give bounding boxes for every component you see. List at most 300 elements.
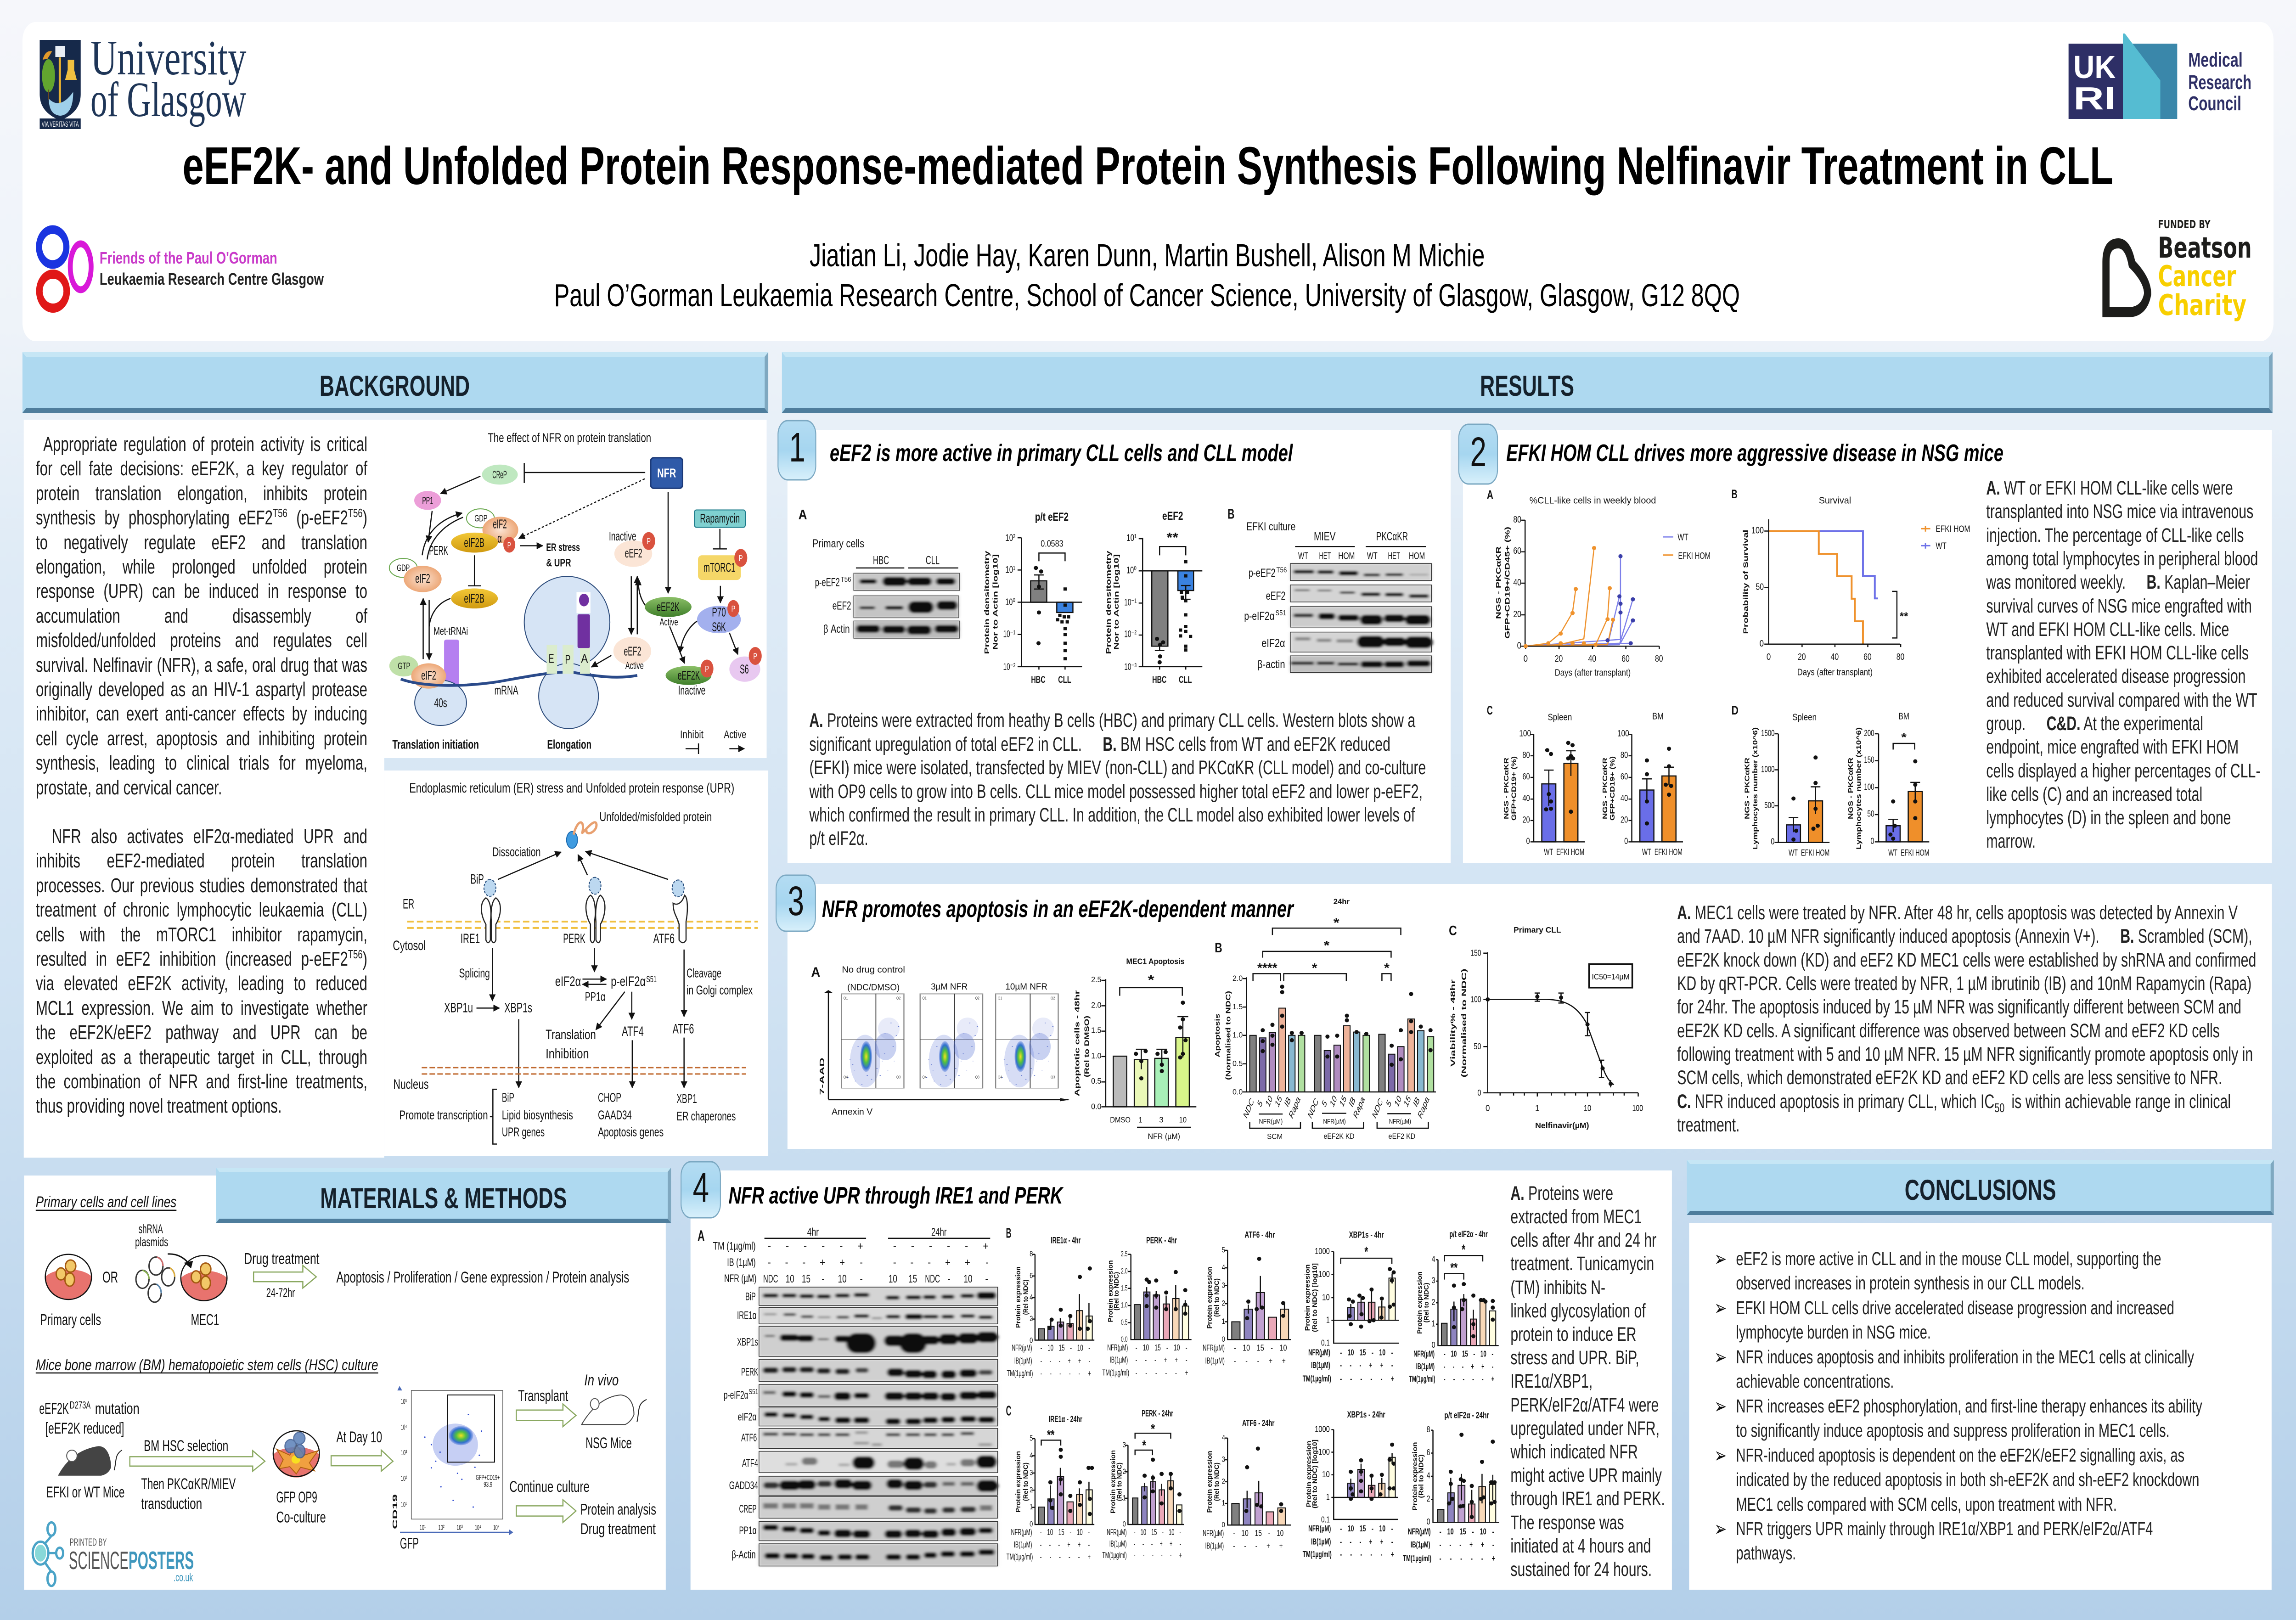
conclusions list: ➢ [1714,1517,1727,1541]
methods workflow diagram: .co.uk [174,1571,193,1584]
panel 3: NFR promotes apoptosis: IC50=14µM [1592,973,1630,981]
protein expression bar charts: 4 [1222,1263,1225,1272]
background text: second paragraph [0,824,390,1119]
background text: first paragraph: cell cycle arrest, apoptosis and inhibiting protein [36,727,367,750]
blood, survival and organ charts: BM [1652,711,1664,721]
blood, survival and organ charts: NGS - PKCαKR [1847,758,1854,819]
blood, survival and organ charts: NGS - PKCαKR [1601,758,1609,819]
protein expression bar charts: Protein expression [1411,1442,1418,1511]
flow plots, apoptosis bars and dose curve: 15 [1273,1094,1284,1108]
methods workflow diagram: BM HSC selection [144,1437,228,1454]
conclusions list: NFR induces apoptosis and inhibits proliferation in the MEC1 cells at clinically [1736,1346,2194,1367]
figure: effect of NFR on protein translation: Active [724,728,746,741]
western blots and bar charts: Protein densitometry [983,550,990,654]
background text: first paragraph: inhibitor, can exert anti-cancer effects by inducing [36,703,367,725]
protein expression bar charts: - - - + + - [1041,1356,1090,1366]
flow plots, apoptosis bars and dose curve: 1.0 [1232,1031,1243,1039]
panel 3 description: SCM cells, which demonstrated eEF2K KD and eEF2 KD cells are less sensitive to NFR. [1677,1067,2222,1088]
protein expression bar charts: TM(1µg/ml) [1007,1552,1033,1562]
panel 4: NFR active UPR [681,1162,1672,1590]
western blots and bar charts: 10⁻² [1124,628,1137,639]
protein expression bar charts: - - - - - + [1134,1550,1182,1560]
UPR western blots: β-Actin [732,1549,756,1561]
blood, survival and organ charts: NGS - PKCαKR [1495,546,1502,619]
flow plot: CD19 vs GFP: 10³ [456,1524,463,1532]
protein expression bar charts: Protein expression [1014,1451,1022,1513]
blood, survival and organ charts: B [1732,487,1738,501]
protein expression bar charts: 3 [1222,1281,1225,1290]
protein expression bar charts: - 10 15 - 10 - [1041,1343,1090,1353]
protein expression bar charts: ** [1047,1427,1055,1443]
protein expression bar charts: 1.5 [1121,1283,1127,1292]
flow plots, apoptosis bars and dose curve: DMSO [1110,1115,1131,1124]
western blots and bar charts: HBC [873,554,889,567]
arrow: transplant [516,1404,576,1427]
flow plots, apoptosis bars and dose curve: 1.5 [1232,1002,1243,1011]
blood, survival and organ charts: NGS - PKCαKR [1743,758,1751,819]
protein expression bar charts: Protein expression [1305,1441,1312,1507]
protein expression bar charts: NFR(µM) [1308,1524,1331,1534]
UPR western blots: NDC [763,1273,778,1285]
blood, survival and organ charts: GFP+CD19+/CD45+ (%) [1503,527,1511,639]
protein expression bar charts: (Rel to NDC) [1022,1279,1030,1315]
authors: Jiatian Li, Jodie Hay, Karen Dunn, Martin Bushell, Alison M Michie [810,237,1485,273]
flow plot: CD19 vs GFP: GFP [400,1535,419,1552]
icon: plasmids [136,1254,191,1302]
protein expression bar charts: Protein expression [1304,1265,1311,1331]
protein expression bar charts: 0 [1030,1336,1033,1345]
protein expression bar charts: - - - - - + [1444,1374,1494,1384]
protein expression bar charts: 4 [1030,1451,1033,1460]
heading 3: NFR promotes apoptosis in an eEF2K-dependent manner [822,895,1294,922]
blood, survival and organ charts: 0 [1767,652,1771,662]
blood, survival and organ charts: 0 [1526,836,1530,846]
protein expression bar charts: - 10 15 - 10 [1234,1343,1287,1353]
protein expression bar charts: 2 [1427,1494,1430,1504]
blood, survival and organ charts: NGS - PKCαKR [1503,758,1510,819]
conclusions list: EFKI HOM CLL cells drive accelerated disease progression and increased [1736,1297,2174,1318]
blood, survival and organ charts: 0 [1517,641,1521,651]
western blots and bar charts: T56 [1277,566,1287,574]
protein expression bar charts: XBP1s - 4hr [1349,1229,1384,1240]
logo: UKRI Medical Research Council: Council [2188,92,2241,115]
flow plots, apoptosis bars and dose curve: 10 [1264,1094,1274,1108]
protein expression bar charts: ATF6 - 24hr [1242,1418,1274,1428]
figure: effect of NFR on protein translation: PERK [429,543,448,557]
protein expression bar charts: TM(1µg/ml) [1303,1550,1332,1559]
protein expression bar charts: - 10 15 - 10 - [1134,1527,1181,1537]
blood, survival and organ charts: 1000 [1761,765,1775,774]
UPR western blots [698,1226,998,1566]
UPR western blots: eIF2α [738,1411,756,1423]
protein expression bar charts: 3 [1222,1455,1225,1464]
figure: effect of NFR on protein translation: E [549,652,554,666]
methods workflow diagram: 24-72hr [266,1286,295,1300]
figure: ER stress and unfolded protein response: Promote transcription [400,1108,488,1122]
panel 4 description: PERK/eIF2α/ATF4 were [1510,1394,1659,1416]
flow plots, apoptosis bars and dose curve: 0.5 [1091,1077,1101,1086]
blood, survival and organ charts: 40 [1588,653,1596,664]
flow plots, apoptosis bars and dose curve: SCM [1267,1132,1283,1141]
protein expression bar charts: 1 [1030,1502,1033,1511]
figure: effect of NFR on protein translation: eIF2 [493,517,507,531]
methods workflow diagram: transduction [141,1495,202,1512]
protein expression bar charts: 1 [1432,1319,1435,1328]
blood, survival and organ charts: C [1487,703,1493,717]
background text: second paragraph: cells with the mTORC1 inhibitor rapamycin, [36,923,367,946]
flow plots, apoptosis bars and dose curve: 5 [1384,1098,1393,1108]
flow plot: CD19 vs GFP: 10⁴ [401,1423,407,1431]
background text: first paragraph: synthesis, leading to clinical trials for myeloma, [36,752,367,774]
flow plots, apoptosis bars and dose curve: **** [1257,961,1277,975]
conclusions list: NFR-induced apoptosis is dependent on the eEF2K/eEF2 signalling axis, as [1736,1445,2184,1466]
panel 4 description: cells after 4hr and 24 hr [1510,1229,1656,1251]
blood, survival and organ charts: EFKI HOM [1678,551,1711,561]
protein expression bar charts: B [1006,1225,1011,1241]
panel 3 description: following treatment with 5 and 10 µM NFR. 15 µM NFR significantly promote apoptosis only in [1677,1043,2253,1065]
flow plots, apoptosis bars and dose curve: (Normalised to NDC) [1224,991,1232,1080]
flow plots, apoptosis bars and dose curve: 0.0 [1232,1088,1243,1096]
flow plots, apoptosis bars and dose curve: eEF2K KD [1324,1132,1355,1140]
western blots and bar charts: B [1227,506,1234,522]
background text: first paragraph: synthesis by phosphorylating eEF2T56 (p-eEF2T56) [36,506,367,529]
UPR western blots: GADD34 [729,1479,758,1492]
figure: ER stress and unfolded protein response: S51 [646,975,657,984]
protein expression bar charts: 5 [1030,1434,1033,1443]
panel 3 description: treatment. [1677,1114,1739,1136]
panel 3 description: KD by qRT-PCR. Cells were treated by NFR, 1 µM ibrutinib (IB) and 10nM Rapamycin (Rapa) [1677,973,2251,994]
methods workflow diagram: Co-culture [276,1508,326,1526]
protein expression bar charts: 6 [1427,1448,1430,1457]
blood, survival and organ charts: 80 [1655,653,1663,664]
protein expression bar charts: 3 [1123,1440,1126,1449]
flow plot: CD19 vs GFP: 10¹ [420,1524,426,1532]
blood, survival and organ charts: 60 [1522,772,1530,782]
western blots and bar charts: HBC [1152,674,1167,685]
western blots and bar charts: ** [1166,530,1179,545]
blood, survival and organ charts: 500 [1764,800,1775,810]
protein expression bar charts: TM(1µg/ml) [1102,1550,1127,1560]
logo: Science Posters: PRINTED BY [70,1536,107,1548]
background text: second paragraph: NFR also activates eIF2α-mediated UPR and [52,825,367,848]
figure: effect of NFR on protein translation: & UPR [546,557,571,568]
flow plot: CD19 vs GFP: 10⁵ [493,1524,499,1532]
methods workflow diagram: plasmids [135,1235,168,1249]
methods workflow diagram: In vivo [584,1371,619,1389]
protein expression bar charts: (Rel to NDC) [1423,1283,1430,1322]
icon: black mouse [58,1446,122,1476]
figure: ER stress and unfolded protein response: Cleavage [687,966,721,980]
figure: effect of NFR on protein translation: eEF2 [625,546,642,560]
blood, survival and organ charts: 40 [1513,578,1521,588]
logo: UKRI Medical Research Council: RI [2073,80,2116,116]
protein expression bar charts: (Rel to NDC) [1116,1462,1123,1501]
protein expression bar charts: * [1151,1421,1155,1437]
background text: first paragraph: for cell fate decisions: eEF2K, a key regulator of [36,457,367,480]
UPR western blots: TM (1µg/ml) [713,1240,756,1253]
flow plots, apoptosis bars and dose curve: 15 [1402,1094,1412,1108]
protein expression bar charts: - 10 15 - 10 - [1340,1348,1393,1357]
protein expression bar charts: (Rel to NDC) [1213,1278,1221,1317]
methods workflow diagram: Primary cells [40,1311,101,1328]
protein expression bar charts: Protein expression [1206,1266,1213,1329]
figure: effect of NFR on protein translation: Inactive [678,683,705,697]
blood, survival and organ charts: 200 [1864,728,1874,738]
panel: materials and methods: Protein analysis [580,1501,656,1518]
panel 4 description: which indicated NFR [1510,1441,1638,1462]
flow plots, apoptosis bars and dose curve: 1.5 [1091,1026,1101,1035]
background text: second paragraph: resulted in eEF2 inhibition (increased p-eEF2T56) [36,947,367,970]
blood, survival and organ charts: Days (after transplant) [1797,667,1873,677]
figure: ER stress and unfolded protein response: Dissociation [492,845,540,859]
western blots and bar charts [799,506,1431,685]
badge 1: 1 [789,424,805,471]
blood, survival and organ charts: %CLL-like cells in weekly blood [1530,495,1656,506]
protein expression bar charts: - - - + + - [1444,1362,1493,1372]
UPR western blots: ATF4 [742,1457,758,1470]
protein expression bar charts: IB(1µM) [1205,1541,1224,1551]
figure: effect of NFR on protein translation: P [565,652,570,667]
protein expression bar charts: - - - - - + [1340,1374,1394,1384]
flow plots, apoptosis bars and dose curve: 0 [1486,1103,1490,1113]
protein expression bar charts: IRE1α - 24hr [1049,1414,1082,1424]
blood, survival and organ charts: WT [1544,847,1553,857]
flow plots, apoptosis bars and dose curve: 10 [1179,1115,1187,1124]
UPR western blots: A [698,1227,704,1244]
flow plots, apoptosis bars and dose curve: 10µM NFR [1005,981,1047,991]
panel 4 description: stress and UPR. BiP, [1510,1347,1639,1368]
protein expression bar charts: * [1142,1438,1147,1453]
UPR western blots: 10 [963,1273,972,1285]
flow plot: CD19 vs GFP: 93.9 [484,1480,492,1489]
flow plots, apoptosis bars and dose curve: Nelfinavir(µM) [1535,1121,1589,1130]
protein expression bar charts: p/t eIF2α - 4hr [1449,1229,1488,1239]
blood, survival and organ charts: 0 [1870,836,1874,846]
protein expression bar charts: NFR(µM) [1203,1528,1224,1538]
logo: Friends of the Paul O'Gorman [39,230,324,308]
flow plots, apoptosis bars and dose curve: 10 [1584,1103,1591,1113]
panel 2 description: WT and EFKI HOM CLL-like cells. Mice [1986,619,2229,640]
panel 2 description: marrow. [1986,830,2036,852]
conclusions list: lymphocyte burden in NSG mice. [1736,1322,1931,1343]
flow plots, apoptosis bars and dose curve: No drug control [842,964,905,975]
protein expression bar charts: 0.1 [1321,1339,1330,1348]
panel 2 description: and reduced survival compared with the WT [1986,689,2257,711]
background text: first paragraph: accumulation and disassembly of [36,605,367,627]
western blots and bar charts: CLL [1179,674,1192,685]
figure: ER stress and unfolded protein response: Endoplasmic reticulum (ER) stress and Unfolded protein response (UPR) [409,781,734,796]
logo: University of Glasgow: of Glasgow [90,73,247,127]
blood, survival and organ charts: 20 [1513,609,1521,619]
UPR western blots: - [822,1273,825,1285]
panel 4 description: upregulated under NFR, [1510,1418,1660,1439]
western blots and bar charts: CLL [926,554,940,567]
UPR western blots: BiP [745,1291,756,1303]
figure: effect of NFR on protein translation: eEF2 [624,644,641,658]
methods workflow diagram: Transplant [518,1387,568,1404]
figure: ER stress and unfolded protein response: Translation [546,1027,596,1042]
protein expression bar charts: (Rel to NDC) [log10] [1311,1263,1318,1332]
protein expression bar charts: - 10 15 - 10 - [1040,1527,1090,1537]
flow plots, apoptosis bars and dose curve: * [1148,973,1154,987]
blood, survival and organ charts: 60 [1621,653,1630,664]
figure: ER stress and unfolded protein response: Nucleus [394,1077,428,1092]
protein expression bar charts: 0 [1222,1335,1225,1344]
background text: second paragraph: via elevated eEF2K activity, leading to reduced [36,972,367,995]
figure: ER stress and unfolded protein response: PERK [563,931,585,946]
protein expression bar charts: Protein expression [1416,1271,1424,1334]
western blots and bar charts: 10⁻² [1003,661,1015,672]
icon: white mouse [582,1395,647,1424]
protein expression bar charts: 1 [1326,1316,1330,1325]
flow plots, apoptosis bars and dose curve [811,897,1643,1141]
flow plots, apoptosis bars and dose curve: eEF2 KD [1389,1132,1415,1140]
methods workflow diagram: MEC1 [191,1311,219,1328]
panel 1 description: A. Proteins were extracted from heathy B cells (HBC) and primary CLL cells. Western blots show a [809,709,1416,731]
figure: ER stress and unfolded protein response: XBP1 [676,1091,697,1106]
protein expression bar charts: (Rel to NDC) [1022,1462,1030,1501]
blood, survival and organ charts: Spleen [1548,712,1572,722]
figure: effect of NFR on protein translation: mTORC1 [703,560,735,574]
panel: background text box [24,420,384,1158]
figure: ER stress and unfolded protein response: Cytosol [393,938,426,953]
flow plots, apoptosis bars and dose curve: NFR(µM) [1389,1118,1411,1125]
protein expression bar charts: 2.5 [1121,1249,1127,1258]
panel 4 description: protein to induce ER [1510,1323,1637,1345]
figure: ER stress and unfolded protein response: ER chaperones [676,1109,736,1123]
flow plots, apoptosis bars and dose curve: Primary CLL [1514,926,1561,934]
western blots and bar charts: eEF2 [1266,589,1285,602]
western blots and bar charts: p-eEF2 [815,576,840,589]
background text: second paragraph: the combination of NFR and first-line treatments, [36,1070,367,1093]
methods workflow diagram: NSG Mice [585,1434,632,1451]
methods workflow diagram: EFKI or WT Mice [46,1483,124,1501]
flow plots, apoptosis bars and dose curve: 2.0 [1091,1001,1101,1009]
badge 3 [776,875,816,931]
blood, survival and organ charts: EFKI HOM [1654,847,1683,857]
background text: second paragraph: exploited as a therapeutic target in CLL, through [36,1046,367,1069]
flow plots, apoptosis bars and dose curve: Annexin V [832,1107,873,1117]
logo: Friends of the Paul O'Gorman: Friends of the Paul O'Gorman [100,249,277,267]
panel 4 description: The response was [1510,1512,1624,1533]
conclusions list: achievable concentrations. [1736,1371,1894,1392]
protein expression bar charts: TM(1µg/ml) [1102,1368,1129,1377]
protein expression bar charts: 4 [1222,1433,1225,1442]
figure: ER stress and unfolded protein response: IRE1 [461,931,480,946]
UPR western blots: - [860,1256,863,1269]
protein expression bar charts: NFR(µM) [1413,1350,1435,1359]
background text: first paragraph: originally developed as an HIV-1 aspartyl protease [36,678,367,701]
figure: effect of NFR on protein translation: NFR [657,466,676,480]
panel 1 description: p/t eIF2α. [809,827,868,849]
blood, survival and organ charts: Lymphocytes number (x10^6) [1855,727,1863,849]
flow plots, apoptosis bars and dose curve: Apoptosis [1214,1014,1221,1057]
methods workflow diagram: Drug treatment [580,1520,656,1537]
background text: second paragraph: inhibits eEF2-mediated protein translation [36,849,367,872]
western blots and bar charts: S51 [1276,609,1286,617]
protein expression bar charts: NFR(µM) [1408,1527,1431,1536]
protein expression bar charts: (Rel to NDC) [1417,1455,1425,1498]
arrow: at day 10 [331,1450,393,1471]
blood, survival and organ charts: 40 [1522,793,1530,803]
flow plots, apoptosis bars and dose curve: 7-AAD [818,1058,826,1095]
protein expression bar charts: 2 [1030,1485,1033,1494]
protein expression bar charts: 100 [1318,1447,1330,1457]
conclusions list [1714,1247,2202,1564]
UPR western blots: 15 [802,1273,810,1285]
background text: second paragraph: the eEF2K/eEF2 pathway and UPR can be [36,1021,367,1044]
blood, survival and organ charts: ** [1900,610,1908,622]
blood, survival and organ charts: 60 [1621,772,1628,782]
figure: effect of NFR on protein translation: S6K [712,620,726,634]
protein expression bar charts: NFR(µM) [1203,1343,1225,1353]
methods workflow diagram: At Day 10 [337,1428,382,1446]
western blots and bar charts: 10¹ [1126,532,1137,543]
logo: Beatson Cancer Charity: FUNDED BY [2158,218,2211,231]
protein expression bar charts: 0.1 [1321,1515,1330,1524]
title: eEF2K- and Unfolded Protein Response-mediated Protein Synthesis Following Nelfinavir Treatment in CLL [183,136,2113,196]
logo: University of Glasgow [39,31,247,129]
western blots and bar charts: eEF2 [1162,509,1183,523]
background text: first paragraph: response (UPR) can be induced in response to [36,580,367,602]
figure: ER stress and unfolded protein response: PP1α [585,990,605,1003]
flow plots, apoptosis bars and dose curve: 3µM NFR [931,981,968,991]
flow plots, apoptosis bars and dose curve: 0 [1477,1088,1481,1097]
figure: effect of NFR on protein translation: Elongation [547,737,591,752]
blood, survival and organ charts: 0 [1624,836,1628,846]
flow plots, apoptosis bars and dose curve: 1 [1139,1115,1142,1124]
methods workflow diagram: GFP OP9 [276,1489,317,1506]
protein expression bar charts: * [1364,1244,1368,1260]
UPR western blots: - [985,1273,988,1285]
protein expression bar charts: 4 [1427,1471,1430,1480]
protein expression bar charts: 4 [1432,1254,1435,1264]
flow plot: CD19 vs GFP: 10⁵ [401,1398,407,1406]
western blots and bar charts: 0.0583 [1041,539,1064,549]
logo: University of Glasgow: VIA VERITAS VITA [42,120,79,129]
blood, survival and organ charts: EFKI HOM [1801,848,1829,858]
flow plots, apoptosis bars and dose curve: 150 [1470,948,1481,958]
panel 2: EFKI HOM CLL aggressive disease [1459,424,2272,863]
western blots and bar charts: PKCαKR [1376,529,1408,543]
blood, survival and organ charts: 60 [1513,546,1521,556]
figure: effect of NFR on protein translation: Inactive [609,529,636,543]
figure: effect of NFR on protein translation: CReP [492,469,507,481]
panel 4 description: sustained for 24 hours. [1510,1558,1652,1580]
methods workflow diagram [33,1193,656,1586]
section bar: MATERIALS & METHODS: MATERIALS & METHODS [320,1182,567,1215]
blood, survival and organ charts: 40 [1621,793,1628,803]
protein expression bar charts: NFR(µM) [1107,1527,1127,1537]
panel 3 description: 50 [1994,1101,2004,1115]
methods workflow diagram: Apoptosis / Proliferation / Gene expression / Protein analysis [337,1269,629,1286]
panel 2 description: was monitored weekly. B. Kaplan–Meier [1986,571,2250,593]
panel 2 description: among total lymphocytes in peripheral blood [1986,548,2258,569]
UPR western blots: S51 [748,1388,758,1396]
figure: ER stress and unfolded protein response: UPR genes [502,1125,545,1139]
protein expression bar charts: 0.0 [1121,1335,1127,1344]
panel 2 description: like cells (C) and an increased total [1986,783,2202,805]
logo: Science Posters: SCIENCE [69,1546,129,1575]
conclusions list: observed increases in protein synthesis in our CLL models. [1736,1272,2085,1294]
protein expression bar charts: 2 [1030,1314,1033,1323]
background text: first paragraph: elongation, while prolonged unfolded protein [36,556,367,578]
figure: effect of NFR on protein translation: GTP [398,661,410,671]
protein expression bar charts: C [1006,1403,1011,1418]
logo: University of Glasgow: University [90,31,247,85]
western blots and bar charts: CLL [1058,674,1071,685]
UPR western blots: XBP1s [737,1336,758,1348]
